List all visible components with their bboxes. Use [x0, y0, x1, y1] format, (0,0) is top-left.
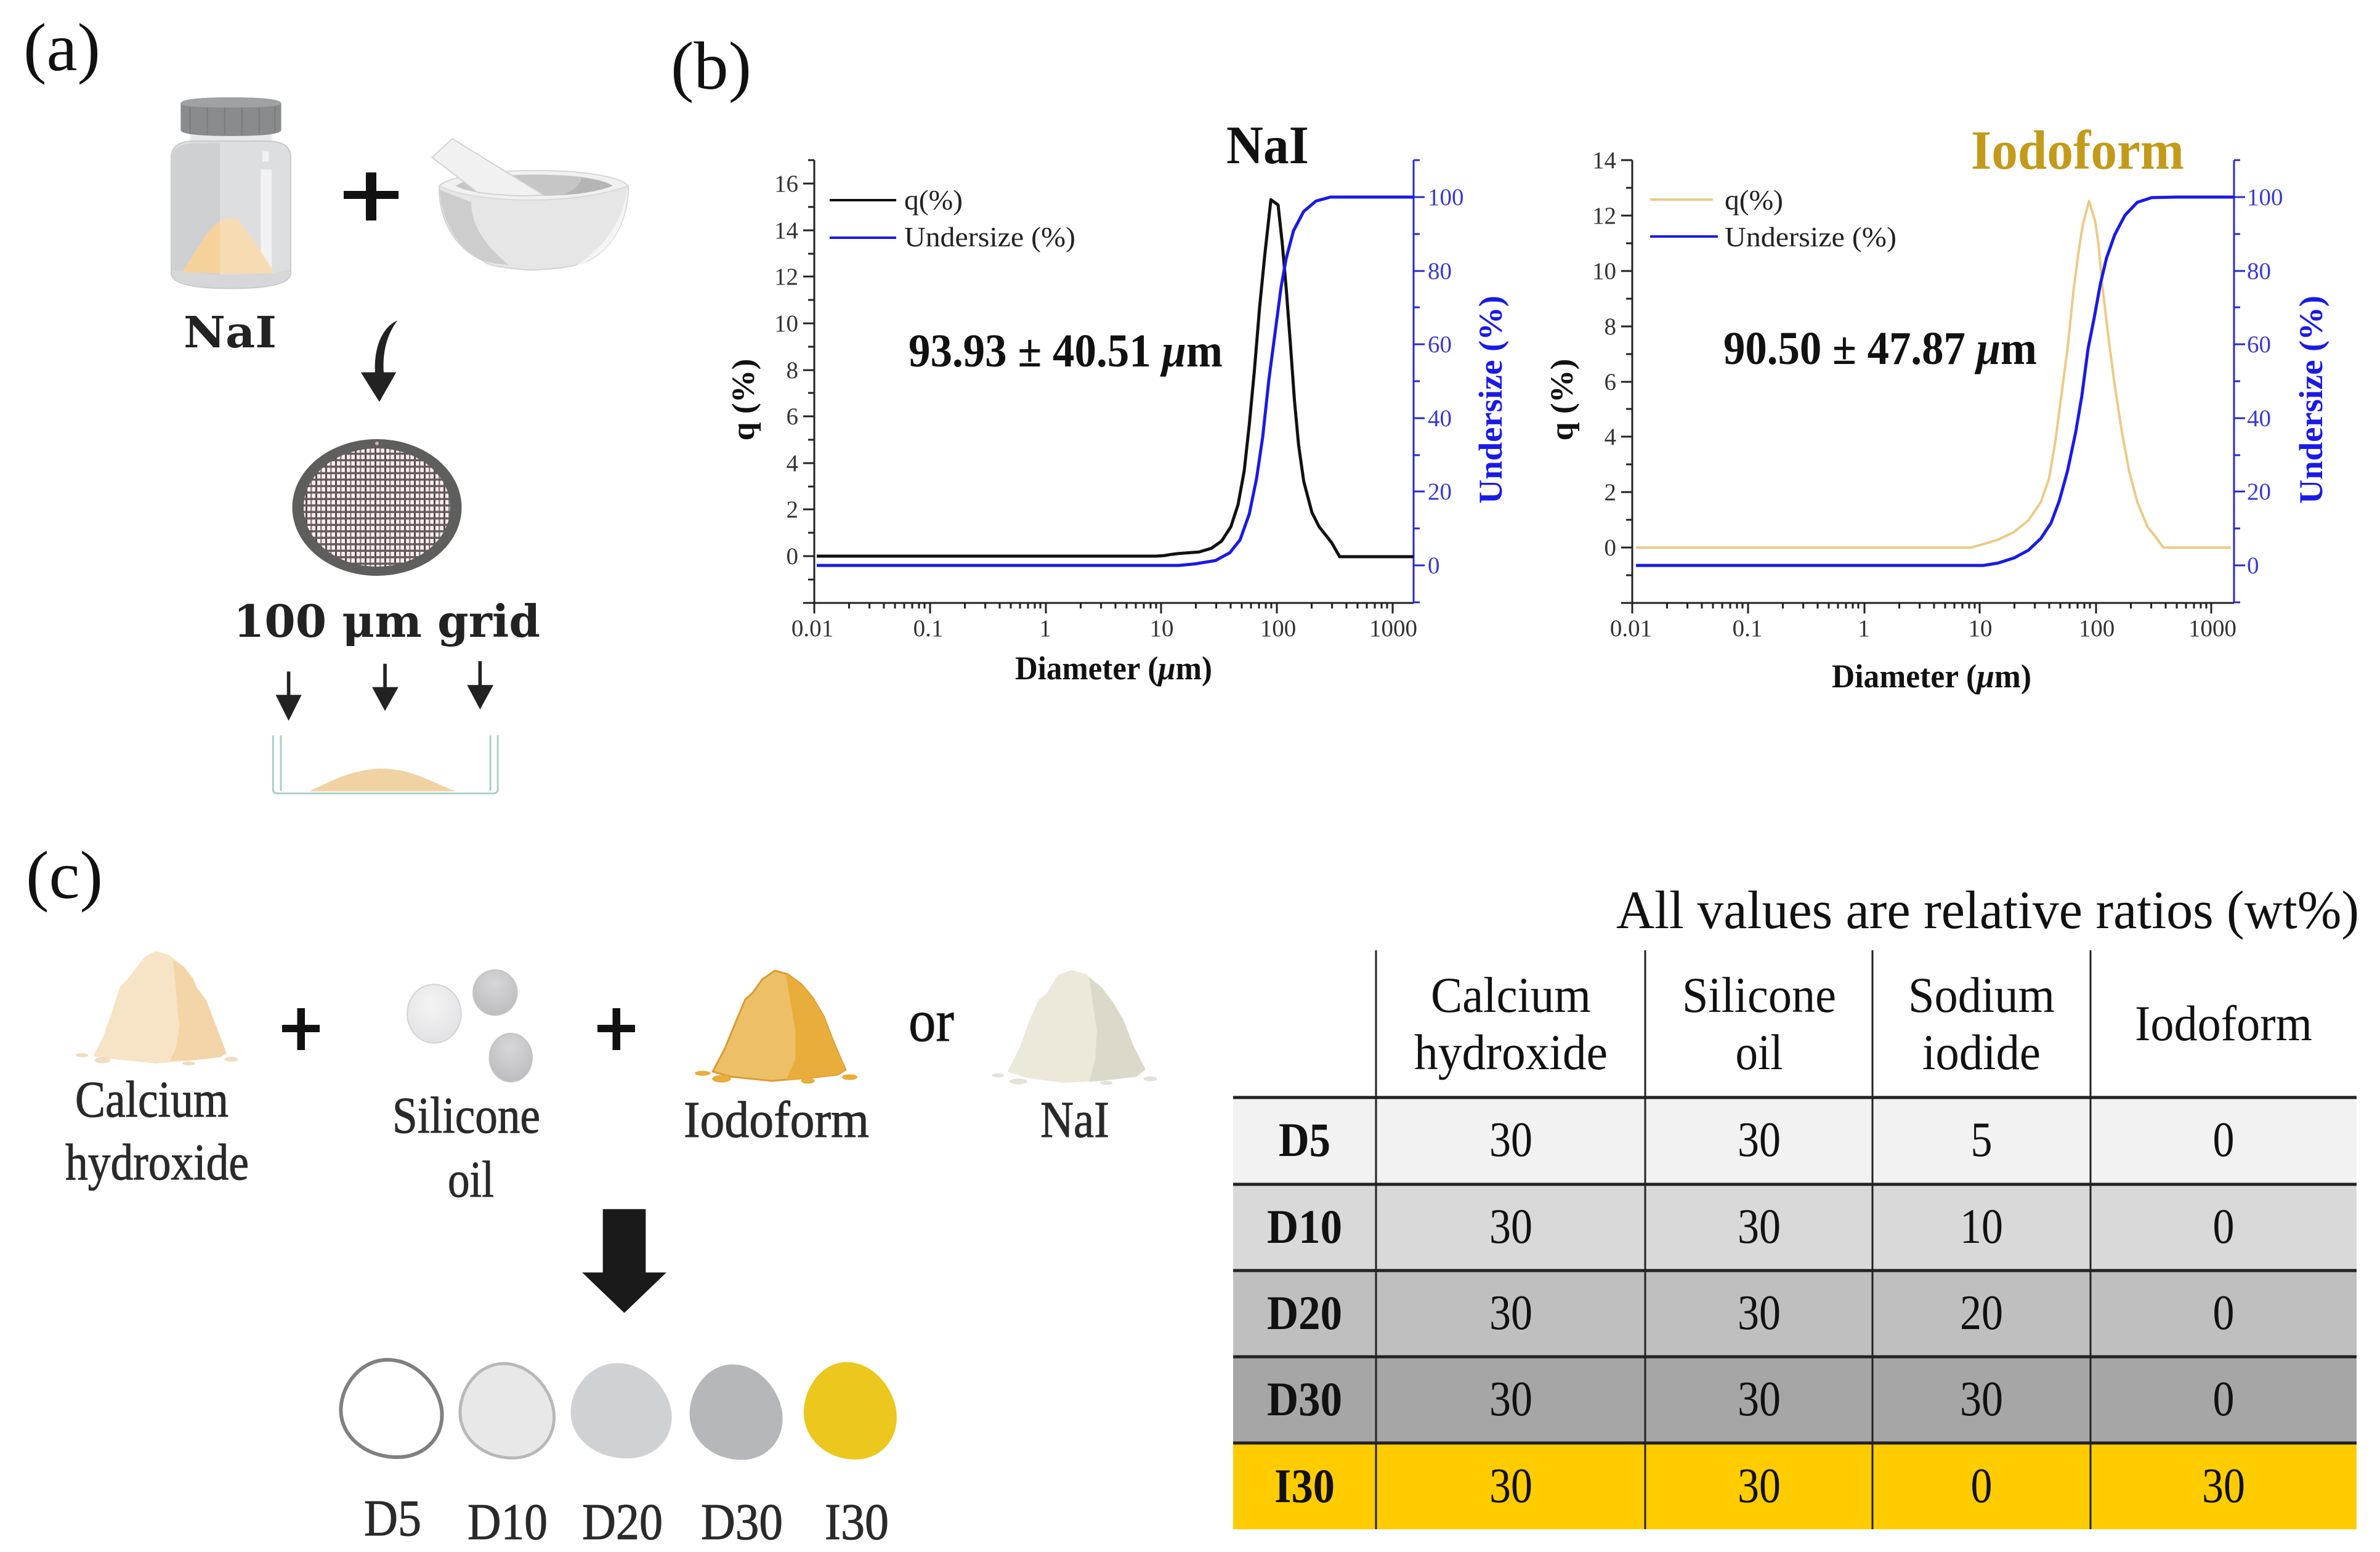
bottom tick labels: 1000	[2188, 615, 2236, 642]
row fills	[1233, 1097, 2357, 1529]
row D30	[1267, 1372, 2235, 1426]
row D10: 0	[2212, 1200, 2235, 1254]
right tick labels: 100	[2247, 184, 2283, 211]
row D5: 30	[1738, 1113, 1781, 1167]
row I30	[1274, 1459, 2245, 1513]
row D20: 30	[1738, 1286, 1781, 1340]
chart title NaI: NaI	[1226, 116, 1309, 176]
ingredient labels: oil	[448, 1151, 494, 1208]
chart: NaI particle size	[726, 116, 1509, 687]
sample labels	[364, 1490, 889, 1551]
row D5: 0	[2212, 1113, 2235, 1167]
row D30: 30	[1738, 1372, 1781, 1426]
right tick labels: 80	[1428, 258, 1452, 285]
right tick labels: 40	[1428, 405, 1452, 432]
icon: dish with sieved powder	[273, 735, 498, 793]
value: mean particle size iodoform: 90.50 ± 47.87 μm	[1723, 323, 2037, 374]
left tick labels: 12	[1592, 203, 1616, 229]
plus sign	[344, 172, 399, 220]
ingredient labels: Calcium	[75, 1071, 229, 1128]
icon: iodoform pile	[695, 971, 857, 1084]
panel c: formulation	[26, 838, 2359, 1551]
table lines	[1233, 1097, 2357, 1443]
row I30: 30	[1489, 1459, 1532, 1513]
icon: calcium hydroxide pile	[76, 951, 238, 1065]
left tick labels: 4	[1604, 424, 1616, 450]
left tick labels: 10	[774, 310, 798, 337]
sample D5	[341, 1360, 442, 1457]
row D30: 0	[2212, 1372, 2235, 1426]
legend: Undersize (%)	[1725, 221, 1896, 253]
icon: 100 micrometre grid	[292, 439, 462, 576]
left tick labels: 12	[774, 264, 798, 290]
left tick labels	[1592, 147, 1616, 561]
panel label c: (c)	[26, 838, 103, 913]
icon: NaI pile	[992, 970, 1157, 1085]
value: mean particle size NaI: 93.93 ± 40.51 μm	[909, 325, 1223, 377]
left tick labels: 0	[1604, 535, 1616, 561]
icon: silicone oil drops	[407, 970, 532, 1082]
left and bottom axes	[803, 160, 1414, 613]
bottom tick labels: 10	[1969, 615, 1992, 642]
big down arrow	[582, 1209, 666, 1313]
panel a: powder preparation	[23, 10, 628, 793]
bottom tick labels: 0.01	[791, 615, 833, 642]
row D10	[1267, 1200, 2235, 1254]
label: 100 um grid: 100 μm grid	[233, 595, 540, 647]
axis title: q: q (%)	[726, 358, 761, 441]
sample labels: I30	[825, 1493, 889, 1551]
left tick labels: 6	[1604, 369, 1616, 395]
row D20	[1267, 1286, 2235, 1340]
sample D10	[460, 1364, 554, 1458]
bottom tick labels: 1000	[1369, 615, 1417, 642]
left tick labels: 2	[1604, 479, 1616, 506]
row I30: 0	[1971, 1459, 1992, 1513]
bottom tick labels: 100	[2079, 615, 2115, 642]
row D30: 30	[1960, 1372, 2003, 1426]
ingredient labels: Silicone	[392, 1087, 540, 1144]
left tick labels: 0	[786, 543, 798, 570]
left tick labels: 14	[774, 217, 798, 244]
panel label a: (a)	[23, 10, 100, 85]
icon: mortar and pestle	[432, 139, 628, 270]
table header: Sodium	[1908, 967, 2055, 1023]
left tick labels: 8	[786, 357, 798, 384]
panel b: particle size charts	[671, 28, 2329, 695]
axis title: Diameter: Diameter (μm)	[1832, 658, 2031, 695]
legend: q(%)	[904, 184, 963, 216]
row D5	[1279, 1113, 2235, 1167]
sample labels: D30	[701, 1493, 783, 1551]
row D10: 10	[1960, 1200, 2003, 1254]
bottom tick labels: 0.01	[1610, 615, 1652, 642]
row D5: 5	[1971, 1113, 1992, 1167]
chart title Iodoform: Iodoform	[1971, 120, 2184, 181]
row I30: 30	[1738, 1459, 1781, 1513]
row D30: D30	[1267, 1372, 1342, 1426]
right tick labels	[2247, 184, 2283, 579]
row D5: D5	[1279, 1113, 1330, 1166]
bottom tick labels	[1610, 615, 2236, 642]
left tick labels: 8	[1604, 313, 1616, 340]
ingredient labels: Iodoform	[684, 1091, 869, 1149]
row D20: 20	[1960, 1286, 2003, 1340]
sample D20	[570, 1363, 672, 1458]
bottom tick labels: 100	[1260, 615, 1296, 642]
left tick labels: 10	[1592, 258, 1616, 285]
right axis	[1414, 160, 1425, 602]
left tick labels: 6	[786, 403, 798, 430]
sample I30	[804, 1362, 897, 1460]
legend	[1650, 184, 1896, 253]
right tick labels: 20	[1428, 479, 1452, 505]
row D20: 0	[2212, 1286, 2235, 1340]
legend	[830, 184, 1075, 253]
table header: hydroxide	[1414, 1024, 1608, 1080]
table header: Calcium	[1431, 967, 1591, 1023]
right tick labels: 80	[2247, 258, 2271, 285]
right tick labels: 0	[1428, 552, 1440, 579]
row D10: D10	[1267, 1200, 1342, 1253]
left and bottom axes	[1621, 160, 2234, 613]
ingredient labels: hydroxide	[65, 1134, 249, 1191]
bottom tick labels: 0.1	[1733, 615, 1762, 642]
bottom tick labels	[791, 615, 1417, 642]
row D30: 30	[1489, 1372, 1532, 1426]
table: composition	[1233, 950, 2357, 1529]
ingredient labels	[65, 988, 1109, 1208]
table header: Iodoform	[2135, 995, 2312, 1051]
curves: q and undersize	[1636, 197, 2234, 565]
right tick labels: 60	[1428, 331, 1452, 358]
bottom tick labels: 10	[1149, 615, 1174, 642]
right tick labels: 0	[2247, 552, 2259, 579]
row D20: D20	[1267, 1286, 1342, 1340]
table header: Silicone	[1682, 967, 1836, 1023]
left tick labels	[774, 171, 798, 570]
axis title: Undersize: Undersize (%)	[1472, 296, 1509, 504]
table header: oil	[1736, 1024, 1783, 1080]
bottom tick labels: 1	[1858, 615, 1870, 642]
legend: Undersize (%)	[904, 221, 1075, 253]
ingredient labels: NaI	[1040, 1091, 1109, 1149]
left tick labels: 16	[774, 171, 798, 197]
left tick labels: 4	[786, 450, 798, 477]
sample D30	[690, 1364, 783, 1460]
sample labels: D5	[364, 1490, 421, 1547]
row I30: 30	[2202, 1459, 2245, 1513]
ingredient labels: or	[909, 988, 954, 1054]
axis title: Undersize: Undersize (%)	[2293, 296, 2329, 504]
axis title: Diameter: Diameter (μm)	[1015, 650, 1212, 687]
right tick labels	[1428, 184, 1463, 579]
label: NaI: NaI	[184, 307, 277, 358]
row I30: I30	[1274, 1459, 1335, 1513]
sample labels: D10	[467, 1493, 548, 1551]
table caption: All values are relative ratios (wt%)	[1616, 881, 2359, 940]
row D10: 30	[1489, 1200, 1532, 1254]
sample labels: D20	[582, 1493, 663, 1551]
left tick labels: 14	[1592, 147, 1616, 174]
row D10: 30	[1738, 1200, 1781, 1254]
bottom tick labels: 0.1	[913, 615, 943, 642]
legend: q(%)	[1725, 184, 1783, 216]
right tick labels: 20	[2247, 479, 2271, 505]
right tick labels: 40	[2247, 405, 2271, 432]
three small arrows	[276, 661, 493, 721]
bottom tick labels: 1	[1039, 615, 1051, 642]
right tick labels: 60	[2247, 331, 2271, 358]
right axis	[2234, 160, 2245, 602]
plus sign	[597, 1008, 635, 1050]
axis title: q: q (%)	[1545, 358, 1580, 441]
table header	[1414, 967, 2312, 1080]
left tick labels: 2	[786, 496, 798, 523]
icon: NaI jar	[171, 97, 291, 288]
row D20: 30	[1489, 1286, 1532, 1340]
right tick labels: 100	[1428, 184, 1463, 211]
row D5: 30	[1489, 1113, 1532, 1167]
plus sign	[282, 1008, 320, 1050]
table header: iodide	[1922, 1024, 2041, 1080]
curved arrow	[361, 320, 397, 402]
panel label b: (b)	[671, 28, 751, 103]
chart: Iodoform particle size	[1545, 120, 2329, 695]
curves: q and undersize	[817, 197, 1414, 565]
